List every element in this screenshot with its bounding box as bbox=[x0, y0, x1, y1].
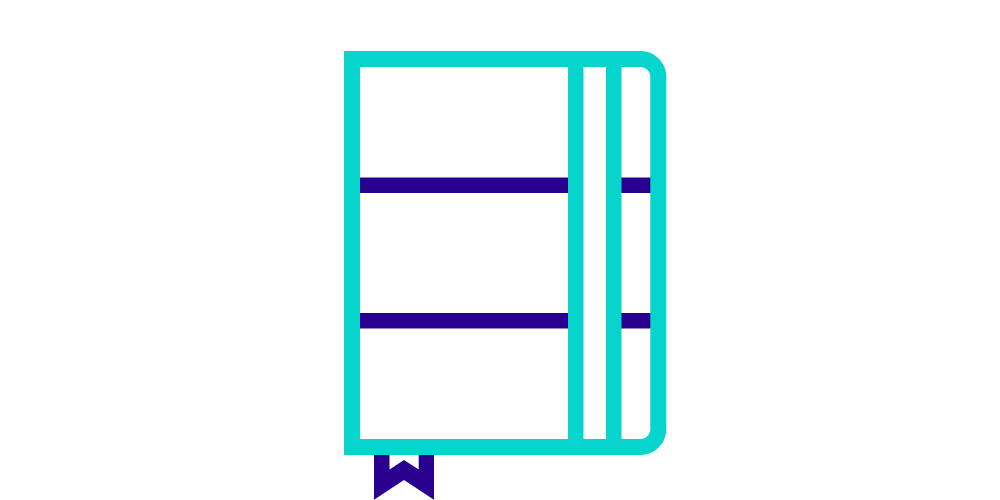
icon: bookmark ribbon bbox=[374, 455, 434, 500]
right vertical strap bbox=[606, 55, 622, 451]
upper elastic band bbox=[358, 178, 652, 193]
lower elastic band bbox=[358, 313, 652, 328]
left vertical strap bbox=[568, 55, 584, 451]
notebook cover outline bbox=[352, 59, 658, 447]
